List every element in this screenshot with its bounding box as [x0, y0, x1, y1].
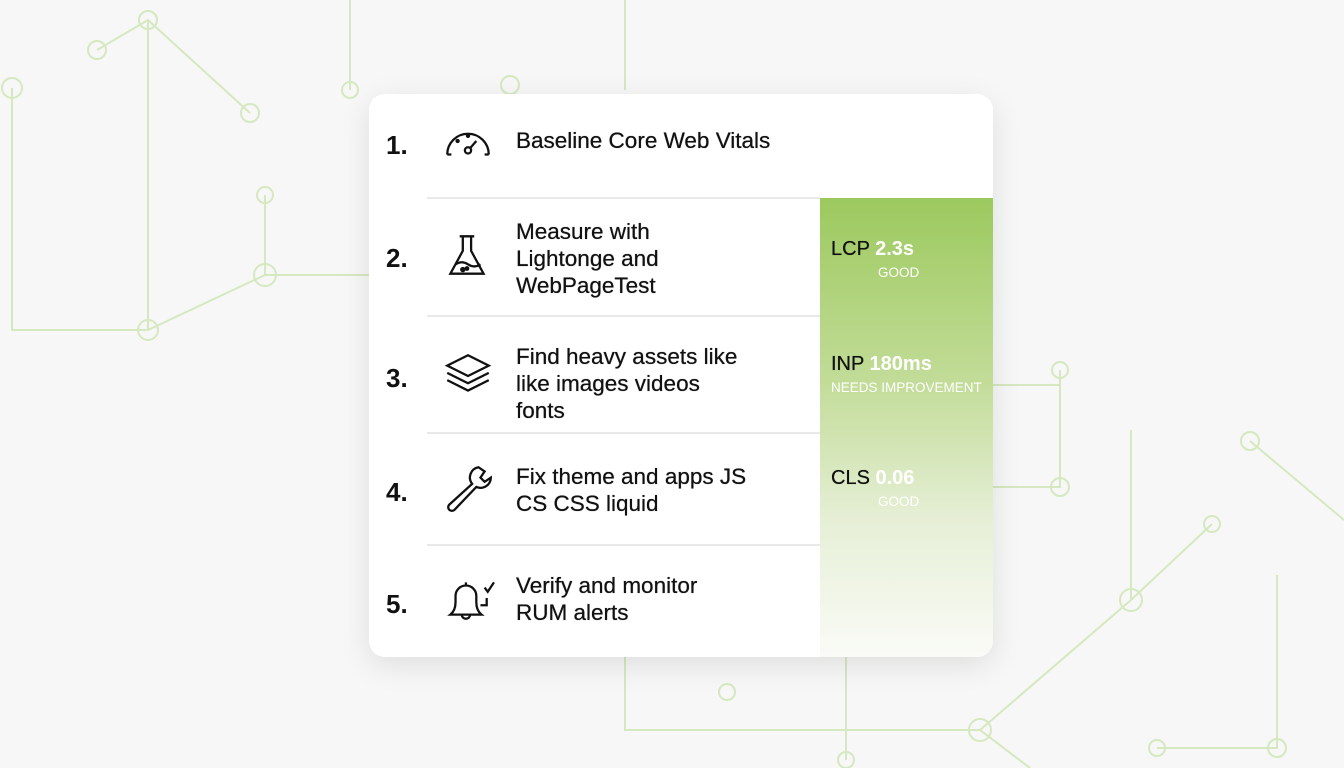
panel: metrics [820, 198, 993, 657]
panel: metrics: GOOD [878, 265, 919, 280]
step 5 [386, 573, 698, 625]
step 2: 2. [386, 243, 408, 273]
step 1: 1. [386, 130, 408, 160]
step 4: 4. [386, 477, 408, 507]
icon: layers [444, 354, 492, 392]
step 5: 5. [386, 589, 408, 619]
step 3: 3. [386, 363, 408, 393]
metric INP: INP 180ms [831, 353, 932, 375]
metric CLS: CLS 0.06 [831, 467, 914, 489]
step 3 [386, 344, 737, 423]
icon: flask [448, 235, 486, 275]
panel: metrics: NEEDS IMPROVEMENT [831, 380, 982, 395]
step 2: Lightonge and [516, 246, 659, 271]
metric LCP: LCP 2.3s [831, 238, 914, 260]
step 5: RUM alerts [516, 600, 629, 625]
step 4: Fix theme and apps JS [516, 464, 746, 489]
icon: wrench [447, 466, 492, 512]
step 2: Measure with [516, 219, 650, 244]
step 4 [386, 464, 746, 516]
step 3: Find heavy assets like [516, 344, 737, 369]
step 2: WebPageTest [516, 273, 656, 298]
step 4: CS CSS liquid [516, 491, 659, 516]
step 3: like images videos [516, 371, 700, 396]
panel: metrics: GOOD [878, 494, 919, 509]
step 2 [386, 219, 659, 298]
step 1: Baseline Core Web Vitals [516, 128, 770, 153]
icon: bell check [447, 582, 495, 620]
step 3: fonts [516, 398, 565, 423]
step 1 [386, 128, 770, 160]
step 5: Verify and monitor [516, 573, 697, 598]
icon: gauge [446, 132, 490, 156]
card: steps [369, 94, 993, 657]
